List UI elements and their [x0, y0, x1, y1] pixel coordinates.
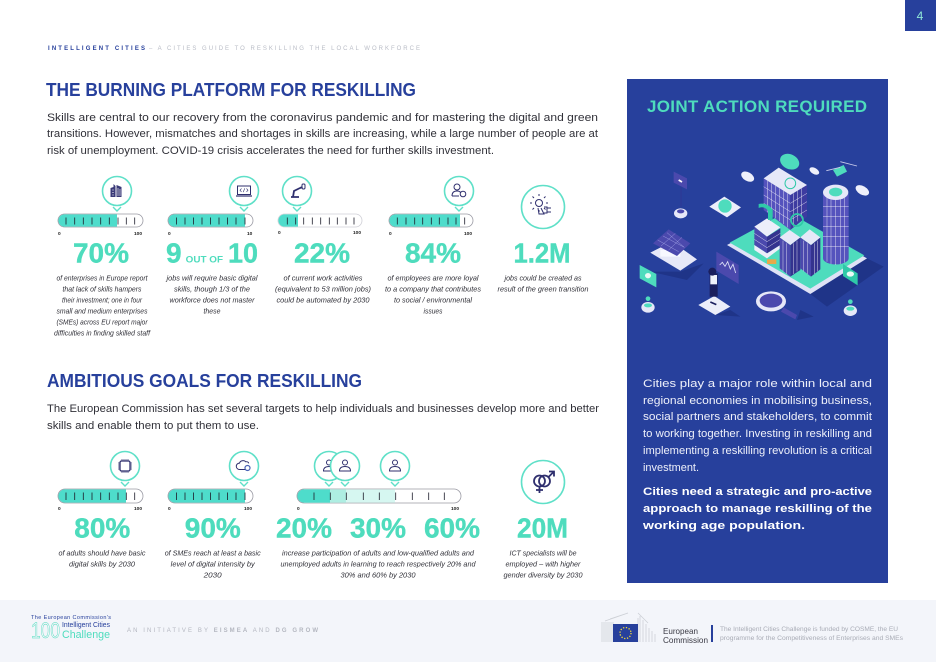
caption: small and medium enterprises — [56, 306, 148, 316]
cylinder tower — [823, 185, 849, 265]
caption — [275, 274, 372, 304]
stat: 20% 30% 60% participation: 20% — [276, 512, 332, 544]
caption — [385, 274, 481, 316]
caption: 2030 — [203, 570, 223, 580]
running header: – A CITIES GUIDE TO RESKILLING THE LOCAL WORKFORCE — [149, 46, 420, 52]
intro text block — [47, 112, 598, 157]
stat: 70% enterprises — [54, 176, 151, 338]
panel key message: working age population. — [642, 520, 805, 532]
panel key message: approach to manage reskilling of the — [643, 503, 872, 515]
figure: 9 out of 10: 9 — [166, 238, 182, 268]
caption — [54, 274, 151, 338]
page number tab — [905, 0, 936, 31]
drone — [826, 162, 857, 177]
logo: 100 intelligent cities challenge — [31, 615, 111, 643]
stat: 20% 30% 60% participation — [276, 452, 480, 580]
caption: unemployed adults in learning to reach respectively 20% and — [280, 560, 476, 568]
caption: gender diversity by 2030 — [504, 570, 583, 580]
icon: gender symbols — [522, 460, 564, 504]
progress bar 80: 0 — [58, 506, 61, 512]
progress bar 84: 100 — [464, 231, 472, 237]
progress bar 70 — [58, 214, 143, 237]
illustration: isometric smart city — [640, 151, 884, 320]
panel paragraph: social partners and stakeholders, to commit — [643, 411, 872, 423]
heading: the burning platform: THE BURNING PLATFORM FOR RESKILLING — [46, 80, 416, 100]
logo: 100 intelligent cities challenge: The European Commission's — [31, 615, 111, 621]
caption — [498, 274, 588, 294]
caption — [280, 548, 476, 580]
caption: increase participation of adults and low-qualified adults and — [282, 548, 475, 558]
car — [767, 259, 776, 264]
panel key message — [642, 486, 872, 532]
platform — [727, 213, 867, 294]
panel: joint action required — [627, 79, 888, 583]
icon: cloud with gear — [230, 452, 258, 486]
teal tag left — [640, 265, 656, 313]
caption: result of the green transition — [498, 284, 588, 294]
caption: issues — [424, 306, 443, 316]
icon: person marker 60 — [380, 452, 410, 486]
progress bar 84 — [389, 214, 473, 237]
caption: to a company that contributes — [385, 284, 481, 294]
logo: european commission: Commission — [663, 635, 708, 645]
caption: these — [204, 306, 220, 316]
caption: jobs will require basic digital — [166, 274, 258, 282]
stat: 80% adults — [58, 452, 146, 568]
caption: digital skills by 2030 — [69, 560, 136, 568]
caption: ICT specialists will be — [510, 548, 576, 558]
icon: microchip — [110, 452, 140, 486]
stat: 20M ICT specialists: 20M — [517, 512, 568, 544]
logo: 100 intelligent cities challenge: Intelligent Cities — [62, 620, 110, 629]
caption: of SMEs reach at least a basic — [165, 548, 261, 558]
panel paragraph: investment. — [643, 462, 699, 474]
logo: 100 intelligent cities challenge: Challenge — [62, 629, 110, 641]
caption: (SMEs) across EU report major — [56, 318, 148, 326]
panel paragraph — [643, 378, 872, 474]
page number tab: 4 — [917, 9, 924, 23]
caption: could be automated by 2030 — [276, 296, 370, 304]
footer band — [0, 600, 936, 662]
panel paragraph: to working together. Investing in reskilling and — [643, 428, 872, 440]
icon: laptop code — [230, 176, 258, 211]
stat: 22% activities — [275, 176, 372, 304]
progress bar three targets: 0 — [297, 506, 300, 512]
progress bar three targets: 100 — [451, 506, 459, 512]
caption: level of digital intensity by — [171, 560, 256, 568]
stat: 84% employees: 84% — [405, 238, 461, 268]
shadows — [650, 258, 884, 320]
intro text block: Skills are central to our recovery from the coronavirus pandemic and for mastering the digital and green — [47, 112, 598, 124]
figure: 9 out of 10: 10 — [228, 238, 258, 268]
icon: person marker 30 — [330, 452, 360, 486]
panel key message: Cities need a strategic and pro-active — [643, 486, 872, 498]
icon: sun and plug — [522, 186, 564, 228]
gear tile — [709, 197, 741, 217]
magnifier — [756, 291, 797, 319]
caption: of adults should have basic — [58, 548, 146, 558]
caption: their investment; one in four — [62, 296, 142, 304]
stat: 22% activities: 22% — [294, 238, 350, 268]
caption: of employees are more loyal — [388, 274, 479, 282]
caption — [58, 548, 146, 568]
progress bar 22: 0 — [278, 230, 281, 236]
caption: of current work activities — [284, 274, 363, 282]
small building — [754, 218, 780, 258]
caption — [166, 274, 258, 316]
figure: 9 out of 10 — [166, 238, 258, 268]
funding note: programme for the Competitiveness of Enterprises and SMEs — [720, 635, 904, 642]
initiative credit: AN INITIATIVE BY EISMEA AND DG GROW — [127, 628, 318, 634]
caption — [165, 548, 261, 580]
icon: robot arm — [282, 176, 312, 211]
icon: buildings — [102, 176, 132, 211]
goals text block — [47, 403, 599, 432]
caption: 30% and 60% by 2030 — [340, 570, 416, 580]
progress bar 70: 0 — [58, 231, 61, 237]
icon: person marker 20 — [314, 452, 344, 486]
panel paragraph: regional economies in mobilising business, — [643, 395, 872, 407]
caption: skills, though 1/3 of the — [174, 284, 250, 294]
caption: that lack of skills hampers — [62, 284, 142, 294]
funding note: The Intelligent Cities Challenge is funded by COSME, the EU — [720, 626, 898, 633]
intro text block: risk of unemployment. COVID-19 crisis accelerates the need for further skills investment. — [47, 145, 494, 157]
stat: 90% SMEs: 90% — [185, 512, 241, 544]
funding note — [720, 626, 904, 642]
progress bar 9 of 10: 10 — [247, 231, 253, 237]
caption: employed – with higher — [506, 560, 581, 568]
caption: workforce does not master — [170, 296, 255, 304]
panel paragraph: Cities play a major role within local and — [643, 378, 872, 390]
stat: 1.2M jobs — [498, 186, 588, 294]
clouds — [739, 151, 871, 198]
stat: 20% 30% 60% participation: 30% — [350, 512, 406, 544]
progress bar 90: 0 — [168, 506, 171, 512]
progress bar 80: 100 — [134, 506, 142, 512]
stat: 20M ICT specialists — [504, 460, 583, 580]
wifi and location badges — [759, 204, 773, 220]
stat: 90% SMEs — [165, 452, 261, 580]
caption: (equivalent to 53 million jobs) — [275, 284, 372, 294]
figure: 9 out of 10: OUT OF — [186, 254, 223, 266]
caption: difficulties in finding skilled staff — [54, 328, 151, 338]
progress bar 22: 100 — [353, 230, 361, 236]
solar panel — [650, 229, 697, 271]
progress bar 22 — [278, 214, 362, 236]
progress bar 9 of 10 — [168, 214, 253, 237]
caption — [504, 548, 583, 580]
progress bar 90: 100 — [244, 506, 252, 512]
twin towers — [780, 229, 820, 277]
stat: 9 out of 10 jobs — [166, 176, 258, 316]
logo: 100 intelligent cities challenge: 100 — [31, 618, 60, 643]
tower back — [764, 168, 807, 230]
progress bar three targets — [297, 489, 461, 512]
teal tag right — [843, 264, 858, 316]
progress bar 90 — [168, 489, 253, 512]
caption: to social / environmental — [394, 296, 472, 304]
stat: 80% adults: 80% — [74, 512, 130, 544]
progress bar 80 — [58, 489, 143, 512]
running header: INTELLIGENT CITIES — [48, 46, 145, 52]
panel heading: JOINT ACTION REQUIRED — [647, 97, 867, 116]
heading: ambitious goals: AMBITIOUS GOALS FOR RESKILLING — [47, 371, 362, 391]
intro text block: transitions. However, mismatches and shortages in skills are increasing, while a large number of people are at — [47, 128, 598, 140]
stat: 20% 30% 60% participation: 60% — [424, 512, 480, 544]
stat: 70% enterprises: 70% — [73, 238, 129, 268]
stat: 1.2M jobs: 1.2M — [514, 238, 570, 268]
caption: jobs could be created as — [504, 274, 582, 282]
panel paragraph: implementing a reskilling revolution is a critical — [643, 445, 872, 457]
icon: person with gear — [444, 176, 474, 211]
logo: european commission — [601, 613, 713, 645]
stat: 84% employees — [385, 176, 481, 316]
logo: european commission: European — [663, 626, 698, 636]
progress bar 9 of 10: 0 — [168, 231, 171, 237]
goals text block: skills and enable them to put them to use. — [47, 420, 259, 432]
progress bar 84: 0 — [389, 231, 392, 237]
person with chart — [698, 252, 739, 315]
flag sensor — [674, 172, 687, 218]
progress bar 70: 100 — [134, 231, 142, 237]
goals text block: The European Commission has set several targets to help individuals and businesses develop more and better — [47, 403, 599, 415]
caption: of enterprises in Europe report — [56, 274, 148, 282]
